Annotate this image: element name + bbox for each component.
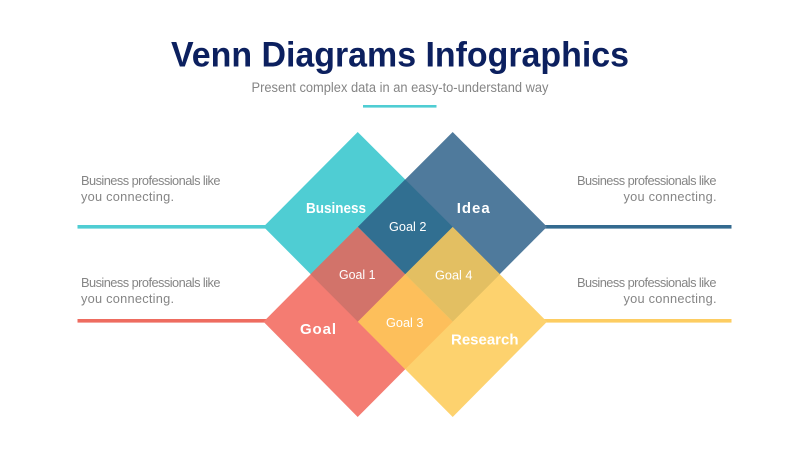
text block: lower right: [577, 275, 716, 306]
label: goal: Goal: [300, 321, 336, 338]
overlap: goal 3: [358, 274, 453, 369]
diamond: business: [264, 132, 452, 322]
text block: upper right: [577, 173, 716, 204]
title: Venn Diagrams Infographics: [171, 36, 629, 74]
label: goal 2: Goal 2: [389, 220, 427, 234]
subtitle: Present complex data in an easy-to-understand way: [252, 80, 549, 95]
diamond: research: [358, 227, 547, 417]
label: goal 3: Goal 3: [386, 316, 424, 330]
diamond: goal: [264, 227, 452, 417]
label: research: Research: [451, 332, 518, 348]
label: idea: Idea: [457, 200, 490, 217]
connector line: research: [543, 319, 732, 323]
label: goal 1: Goal 1: [339, 268, 376, 282]
label: goal 4: Goal 4: [435, 268, 473, 282]
text block: lower left: you connecting.: [81, 291, 174, 306]
text block: upper left: [81, 173, 220, 204]
text block: lower right: Business professionals like: [577, 275, 716, 290]
connector line: idea: [543, 225, 732, 229]
overlap: goal 4: [405, 227, 500, 322]
connector line: business: [78, 225, 268, 229]
venn diagram: [264, 132, 547, 417]
title accent rule: [363, 105, 436, 108]
text block: lower right: you connecting.: [624, 291, 716, 306]
diamond: idea: [358, 132, 547, 322]
connector line: goal: [78, 319, 268, 323]
text block: lower left: [81, 275, 220, 306]
text block: upper right: Business professionals like: [577, 173, 716, 188]
label: business: Business: [306, 200, 366, 217]
text block: lower left: Business professionals like: [81, 275, 220, 290]
text block: upper left: you connecting.: [81, 189, 174, 204]
overlap: goal 2: [358, 180, 453, 274]
text block: upper left: Business professionals like: [81, 173, 220, 188]
overlap: goal 1: [310, 227, 405, 322]
text block: upper right: you connecting.: [624, 189, 716, 204]
